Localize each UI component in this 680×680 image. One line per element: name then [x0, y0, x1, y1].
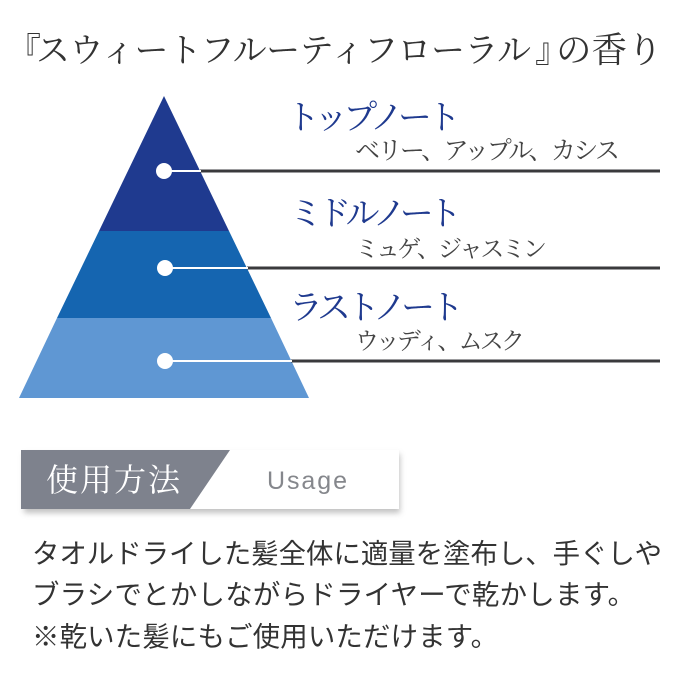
usage instructions: [32, 538, 662, 652]
banner dark tab: [21, 450, 230, 509]
banner subtitle: Usage: [267, 467, 347, 495]
title: 『: [7, 23, 41, 72]
top note ingredients: ベリー、アップル、カシス: [355, 131, 620, 167]
middle note leader line: [157, 260, 660, 276]
usage instructions: ※乾いた髪にもご使用いただけます。: [32, 621, 498, 652]
usage instructions: ブラシでとかしながらドライヤーで乾かします。: [32, 579, 635, 610]
title: スウィートフルーティフローラル: [36, 23, 531, 72]
title: 』: [535, 23, 569, 72]
middle note heading: ミドルノート: [289, 186, 462, 235]
pyramid tier: last note: [19, 318, 309, 398]
title: の香り: [556, 22, 663, 73]
pyramid chart: [19, 96, 309, 398]
middle note ingredients: ミュゲ、ジャスミン: [355, 229, 547, 264]
top note leader line: [156, 163, 660, 179]
usage banner: [21, 450, 400, 513]
last note heading: ラストノート: [289, 280, 464, 329]
pyramid tier: top note: [99, 96, 229, 231]
usage instructions: タオルドライした髪全体に適量を塗布し、手ぐしや: [32, 538, 662, 569]
banner heading: 使用方法: [46, 455, 181, 501]
last note leader line: [157, 353, 660, 369]
top note heading: トップノート: [286, 90, 461, 139]
pyramid tier: middle note: [57, 231, 271, 318]
last note ingredients: ウッディ、ムスク: [355, 321, 525, 356]
